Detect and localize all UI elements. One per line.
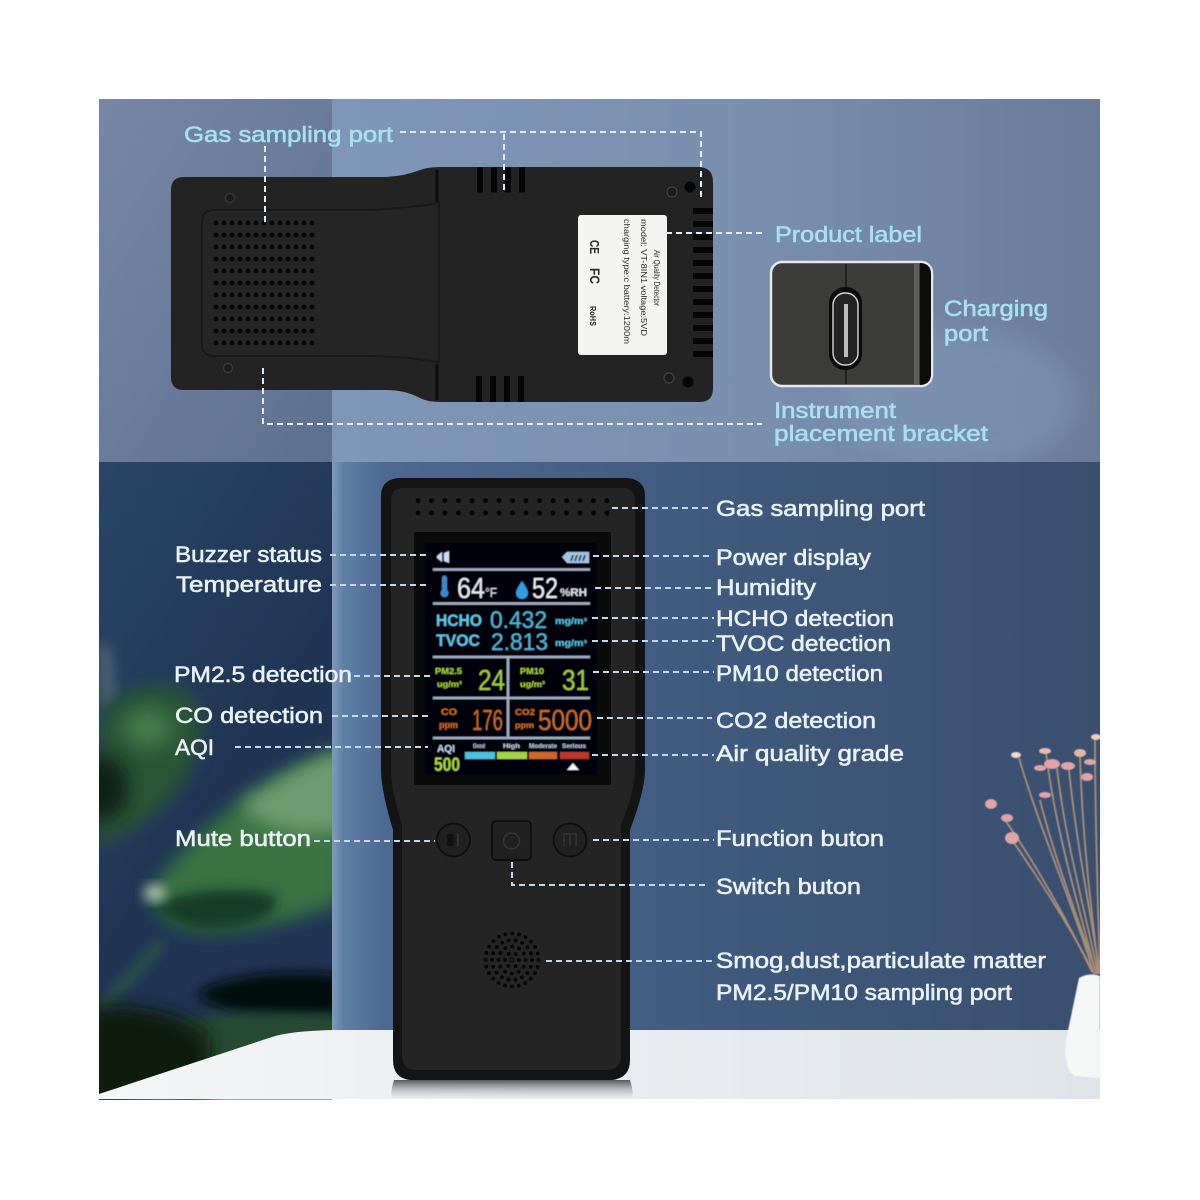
callout: smog and particulate sampling port (546, 948, 1046, 1005)
PM2.5 reading: 24 (478, 665, 505, 697)
product label sticker: charging type:c battery:1200m (622, 219, 632, 344)
HCHO reading: 0.432 (490, 607, 547, 634)
CO reading: ppm (439, 720, 458, 730)
callout: power display: Power display (716, 545, 871, 570)
callout: buzzer status: Buzzer status (175, 542, 322, 567)
PM10 reading (520, 665, 589, 697)
AQI reading: AQI (437, 744, 455, 755)
temperature and humidity: °F (485, 585, 497, 600)
callout: instrument placement bracket: Instrument (774, 398, 896, 423)
callout: switch button: Switch buton (716, 874, 861, 899)
device body (381, 478, 645, 1080)
temperature and humidity: %RH (560, 587, 587, 599)
callout: function button: Function buton (716, 826, 884, 851)
HCHO reading: mg/m³ (555, 616, 587, 626)
charging port inset (771, 262, 932, 386)
PM2.5 reading: PM2.5 (435, 666, 462, 676)
white table surface (99, 1030, 1100, 1099)
callout: charging port (944, 296, 1048, 346)
bottom vent slots (476, 376, 526, 402)
status row: //// (570, 554, 587, 563)
product label sticker: Air Quality Detector (652, 250, 662, 306)
callout: PM2.5 detection: PM2.5 detection (174, 662, 352, 687)
callout: TVOC detection: TVOC detection (716, 631, 891, 656)
callout: charging port: Charging (944, 296, 1048, 321)
callout: instrument placement bracket: placement bracket (774, 421, 988, 446)
PM10 reading: ug/m³ (520, 679, 545, 689)
product label sticker (578, 215, 667, 355)
temperature and humidity: 52 (532, 573, 558, 605)
callout: instrument placement bracket (263, 368, 988, 446)
blurred plant leaves (99, 642, 332, 1100)
temperature and humidity: 64 (457, 573, 485, 605)
TVOC reading: TVOC (436, 631, 480, 650)
right vent slots (693, 208, 713, 364)
TVOC reading: 2.813 (491, 629, 548, 656)
TVOC reading (436, 629, 587, 656)
front view of device (381, 478, 645, 1099)
callout: PM10 detection: PM10 detection (716, 661, 883, 686)
infographic canvas (99, 99, 1100, 1100)
function button (554, 824, 586, 856)
callout: gas sampling port (back): Gas sampling port (184, 122, 393, 147)
HCHO reading (436, 607, 587, 634)
air quality grade bars: High (503, 743, 520, 750)
callout: gas sampling port (back) (184, 122, 701, 224)
temperature and humidity (440, 573, 587, 605)
PM10 reading: 31 (562, 665, 589, 697)
CO2 reading: ppm (515, 720, 534, 730)
callout: CO detection: CO detection (175, 703, 323, 728)
callout: charging port: port (944, 321, 988, 346)
callout: smog and particulate sampling port: PM2.5/PM10 sampling port (716, 980, 1012, 1005)
top vent slots (477, 168, 527, 192)
callout: CO2 detection: CO2 detection (716, 708, 876, 733)
USB-C socket (829, 287, 862, 370)
CO2 reading: 5000 (538, 705, 592, 737)
switch button (492, 821, 531, 860)
top vent holes (411, 494, 614, 520)
product label sticker: CE (587, 240, 602, 254)
back view of device (171, 167, 713, 402)
CO2 reading: CO2 (515, 707, 535, 717)
callout: HCHO detection: HCHO detection (716, 606, 894, 631)
right callouts (512, 496, 1046, 1005)
bracket vent holes (212, 217, 316, 349)
PM sampling port holes (486, 934, 538, 986)
air quality grade bars: Good (473, 743, 485, 750)
product label sticker: FC (587, 268, 603, 284)
dried flowers in vase (985, 734, 1101, 1078)
PM10 reading: PM10 (520, 666, 544, 676)
callout: air quality grade: Air quality grade (716, 741, 904, 766)
air quality grade bars: Moderate (529, 743, 557, 750)
callout: temperature: Temperature (176, 572, 322, 597)
callout: gas sampling port (front): Gas sampling port (716, 496, 925, 521)
CO2 reading (515, 705, 592, 737)
product label sticker: RoHS (588, 306, 598, 326)
left callouts (174, 542, 435, 851)
HCHO reading: HCHO (436, 611, 482, 630)
callout: product label: Product label (775, 222, 922, 247)
callout: switch button (512, 862, 861, 899)
CO reading (439, 705, 503, 737)
callout: humidity: Humidity (716, 575, 816, 600)
AQI reading: 500 (434, 755, 460, 776)
air quality grade bars (465, 743, 589, 770)
bracket arms (436, 170, 438, 400)
top callouts (184, 122, 1048, 446)
callout: AQI: AQI (175, 735, 214, 760)
PM2.5 reading: ug/m³ (437, 679, 462, 689)
AQI reading (434, 744, 460, 776)
PM2.5 reading (435, 665, 505, 697)
CO reading: 176 (472, 705, 503, 737)
TVOC reading: mg/m³ (555, 638, 587, 648)
background photo scene (99, 99, 1100, 1099)
status row (437, 551, 589, 563)
callout: mute button: Mute button (175, 826, 311, 851)
screen bezel (414, 532, 611, 785)
LCD display (425, 543, 597, 776)
bracket recess (202, 203, 439, 362)
screws (224, 182, 696, 388)
callout: smog and particulate sampling port: Smog,dust,particulate matter (716, 948, 1046, 973)
air quality grade bars: Serious (562, 743, 586, 750)
mute button (437, 824, 470, 856)
product label sticker: model: VT-8IN1 voltage:5VD (639, 219, 649, 336)
CO reading: CO (441, 707, 457, 717)
device shadow (391, 1080, 633, 1099)
